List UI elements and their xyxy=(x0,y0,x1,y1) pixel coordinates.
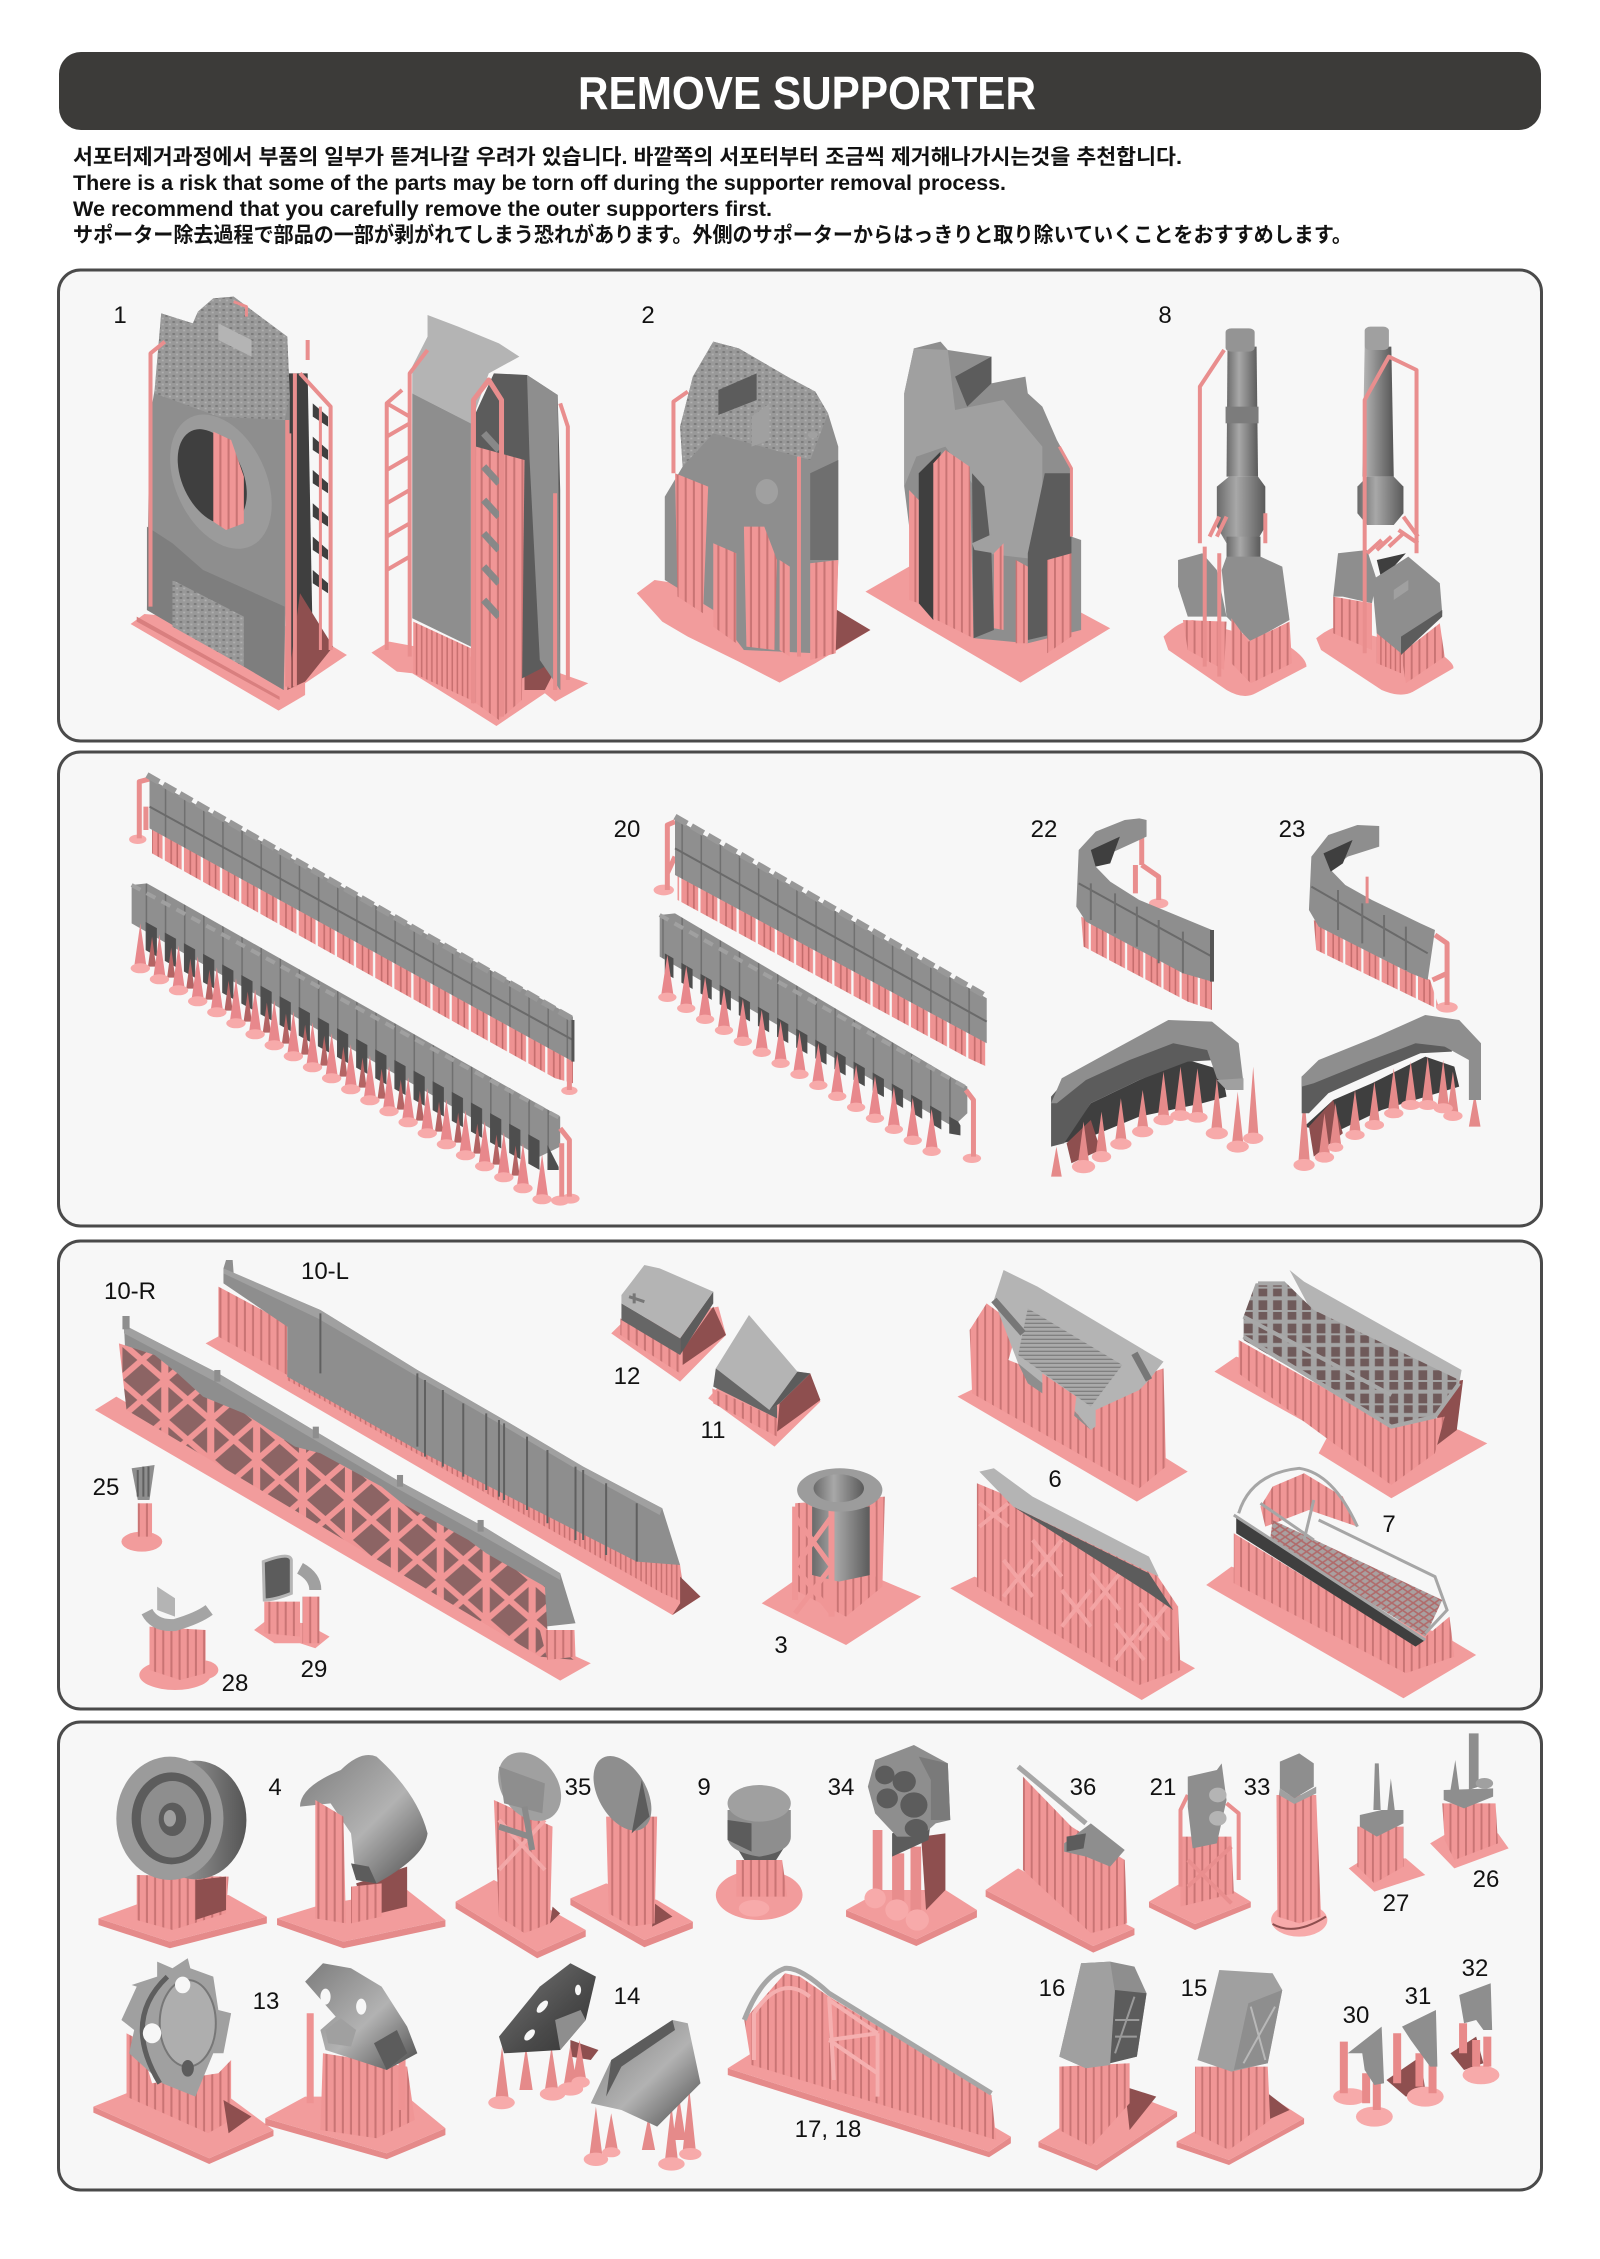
label 11: 11 xyxy=(701,1417,725,1444)
label 23: 23 xyxy=(1279,816,1305,843)
label 4: 4 xyxy=(268,1774,282,1801)
part 4 rear wheel xyxy=(277,1755,445,1948)
part 10-R skirt xyxy=(95,1316,591,1681)
part 6 front xyxy=(958,1270,1188,1502)
part 35 front xyxy=(456,1748,586,1958)
label 9: 9 xyxy=(697,1774,711,1801)
panel: wheels, sprockets and small parts xyxy=(58,1722,1542,2190)
part 4 front wheel xyxy=(98,1757,267,1948)
label 36: 36 xyxy=(1070,1774,1096,1801)
label 10-R: 10-R xyxy=(104,1278,156,1305)
part 30 xyxy=(1333,2027,1393,2127)
label 10-L: 10-L xyxy=(301,1258,349,1285)
part 22 upper xyxy=(1076,818,1212,1010)
label 22: 22 xyxy=(1031,816,1057,843)
label 29: 29 xyxy=(301,1656,327,1683)
part 15 xyxy=(1177,1970,1304,2165)
part 32 xyxy=(1450,1983,1499,2084)
label 3: 3 xyxy=(774,1632,788,1659)
part 29 xyxy=(254,1556,330,1648)
part 1 rear xyxy=(371,315,588,726)
label 14: 14 xyxy=(614,1983,640,2010)
track upper row xyxy=(129,775,578,1095)
part 9 xyxy=(716,1785,803,1920)
label 2: 2 xyxy=(641,302,655,329)
label 17, 18: 17, 18 xyxy=(795,2116,861,2143)
label 16: 16 xyxy=(1039,1975,1065,2002)
part 2 rear xyxy=(865,342,1110,683)
part 35 rear xyxy=(570,1752,693,1947)
part 20 upper xyxy=(654,817,987,1067)
panel: side skirts and small parts xyxy=(58,1241,1542,1709)
part 8 rear xyxy=(1316,327,1453,695)
label 35: 35 xyxy=(565,1774,591,1801)
instruction text xyxy=(73,146,1352,247)
part 1 front xyxy=(131,297,347,711)
label 27: 27 xyxy=(1383,1890,1409,1917)
part 27 xyxy=(1349,1763,1425,1892)
label 15: 15 xyxy=(1181,1975,1207,2002)
label 21: 21 xyxy=(1150,1774,1176,1801)
part 11 xyxy=(708,1315,820,1447)
label 32: 32 xyxy=(1462,1955,1488,1982)
part 14 rear xyxy=(584,2020,702,2171)
label 30: 30 xyxy=(1343,2002,1369,2029)
part 33 xyxy=(1271,1753,1327,1937)
part 14 front xyxy=(488,1963,598,2109)
part 6 rear xyxy=(950,1468,1195,1700)
part 23 upper xyxy=(1309,825,1458,1013)
label 33: 33 xyxy=(1244,1774,1270,1801)
part 22 lower arc xyxy=(1051,1020,1263,1177)
instruction text: 서포터제거과정에서 부품의 일부가 뜯겨나갈 우려가 있습니다. 바깥쪽의 서포터부터 조금씩 제거해나가시는것을 추천합니다. xyxy=(73,146,1182,169)
instruction text: サポーター除去過程で部品の一部が剥がれてしまう恐れがあります。外側のサポーターからはっきりと取り除いていくことをおすすめします。 xyxy=(73,223,1352,247)
part 28 xyxy=(139,1587,218,1690)
part 10-L skirt xyxy=(206,1260,701,1615)
label 12: 12 xyxy=(614,1363,640,1390)
part 20 lower xyxy=(658,913,981,1163)
panel: track links xyxy=(58,752,1542,1226)
part 21 xyxy=(1149,1763,1251,1930)
panel: hull and turret parts xyxy=(58,270,1542,741)
label 13: 13 xyxy=(253,1988,279,2015)
instruction text: There is a risk that some of the parts may be torn off during the supporter removal process. xyxy=(73,172,1006,195)
label 34: 34 xyxy=(828,1774,854,1801)
label 26: 26 xyxy=(1473,1866,1499,1893)
label 31: 31 xyxy=(1405,1983,1431,2010)
part 36 xyxy=(986,1767,1134,1953)
part 8 front xyxy=(1164,328,1307,696)
part 16 xyxy=(1038,1962,1177,2171)
part 34 xyxy=(846,1745,977,1946)
label 8: 8 xyxy=(1158,302,1172,329)
part 31 xyxy=(1386,2010,1444,2107)
part 3 xyxy=(762,1468,921,1645)
part 26 xyxy=(1430,1733,1509,1868)
title banner xyxy=(59,52,1541,130)
part 2 front xyxy=(637,342,870,683)
part 25 xyxy=(121,1465,162,1552)
part 23 lower arc xyxy=(1293,1015,1481,1171)
parts 17, 18 xyxy=(728,1968,1011,2157)
track lower row xyxy=(131,883,580,1206)
label 28: 28 xyxy=(222,1670,248,1697)
title: REMOVE SUPPORTER xyxy=(578,67,1036,119)
label 1: 1 xyxy=(113,302,127,329)
part 7 front xyxy=(1214,1270,1487,1498)
label 20: 20 xyxy=(614,816,640,843)
part 7 rear xyxy=(1206,1468,1476,1698)
label 25: 25 xyxy=(93,1474,119,1501)
label 6: 6 xyxy=(1048,1466,1062,1493)
part 12 xyxy=(611,1265,726,1382)
part 13 front xyxy=(93,1958,273,2164)
label 7: 7 xyxy=(1382,1511,1396,1538)
instruction text: We recommend that you carefully remove the outer supporters first. xyxy=(73,198,772,221)
part 13 rear xyxy=(265,1963,445,2159)
